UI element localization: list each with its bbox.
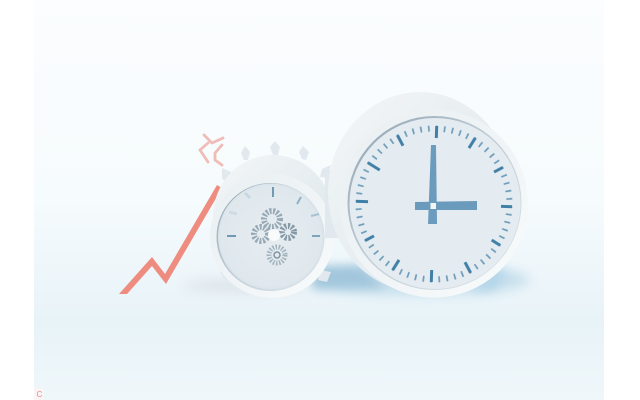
small clock inner edge: [216, 183, 324, 291]
minute hand: [428, 145, 437, 224]
connector between clocks: [325, 170, 349, 238]
large clock rim: [340, 110, 528, 298]
small clock: [210, 141, 334, 298]
large clock hour marks: [353, 123, 515, 285]
small clock face: [218, 184, 324, 290]
large clock: [328, 92, 528, 298]
large clock hands: [415, 145, 477, 224]
large clock minute marks: [356, 126, 512, 282]
small corner badge: C: [36, 390, 42, 399]
large clock face: [350, 118, 520, 289]
large clock back body: [328, 92, 512, 292]
small clock ticks: [227, 187, 320, 236]
small corner badge: [34, 388, 44, 400]
small clock spikes: [220, 141, 331, 282]
small clock back body: [213, 155, 333, 279]
floor shadow: [183, 265, 530, 295]
stress burst mark: [200, 135, 223, 165]
small clock rim: [210, 174, 334, 298]
hour hand: [415, 201, 477, 210]
red rising arrow line: [119, 185, 222, 294]
large clock inner edge: [348, 116, 522, 290]
hand pivot: [430, 203, 436, 209]
small clock gears: [254, 211, 294, 263]
